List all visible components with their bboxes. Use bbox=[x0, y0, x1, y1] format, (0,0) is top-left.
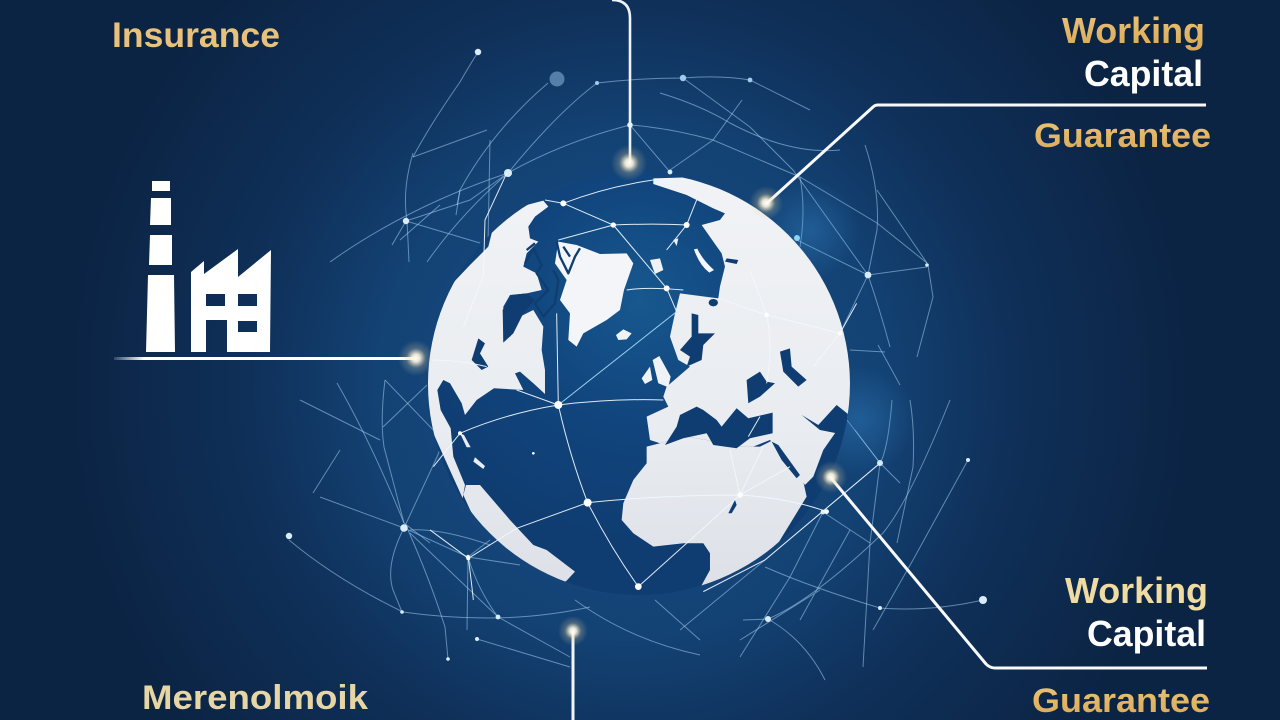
connector: left bbox=[114, 340, 434, 376]
label: Insurance: Insurance bbox=[112, 16, 280, 55]
faded dot bbox=[550, 72, 564, 86]
globe ocean bbox=[428, 173, 850, 595]
connector: top bbox=[611, 0, 647, 181]
connector: bottom bbox=[558, 616, 588, 720]
inland seas bbox=[472, 258, 853, 513]
label: Working: Working bbox=[1065, 570, 1208, 611]
chimney bbox=[146, 181, 175, 352]
label: Guarantee: Guarantee bbox=[1034, 117, 1211, 155]
label: Guarantee: Guarantee bbox=[1032, 682, 1210, 720]
icon: factory bbox=[146, 181, 271, 352]
land: Greenland bbox=[555, 242, 633, 347]
label: Working: Working bbox=[1062, 10, 1205, 51]
label: bottom right group bbox=[1032, 570, 1210, 720]
land: South America bbox=[463, 485, 575, 587]
connector: upper right bbox=[749, 105, 1206, 220]
Mediterranean bbox=[665, 407, 773, 448]
globe grid nodes bbox=[458, 200, 842, 590]
background network nodes bbox=[286, 49, 987, 661]
Canadian archipelago channels bbox=[525, 242, 580, 317]
network mesh behind globe bbox=[289, 52, 983, 680]
Hudson Bay bbox=[503, 293, 535, 343]
land: North Atlantic islands bbox=[616, 238, 678, 387]
land: Africa bbox=[622, 437, 807, 592]
factory building bbox=[191, 249, 271, 352]
soft blue glow at globe rim bbox=[760, 180, 915, 475]
label: Merenolmoik: Merenolmoik bbox=[142, 679, 368, 717]
land: sliver in arctic sea bbox=[694, 249, 714, 273]
land: Caribbean islands bbox=[460, 433, 485, 469]
globe grid lines bbox=[430, 173, 880, 600]
label: Capital: Capital bbox=[1084, 53, 1203, 94]
globe bbox=[413, 173, 887, 600]
label: Capital: Capital bbox=[1087, 613, 1206, 654]
label: top right group bbox=[1034, 10, 1211, 155]
land: Eurasia bbox=[646, 178, 850, 485]
land: North America bbox=[428, 200, 548, 498]
connector: lower right bbox=[815, 461, 1207, 668]
